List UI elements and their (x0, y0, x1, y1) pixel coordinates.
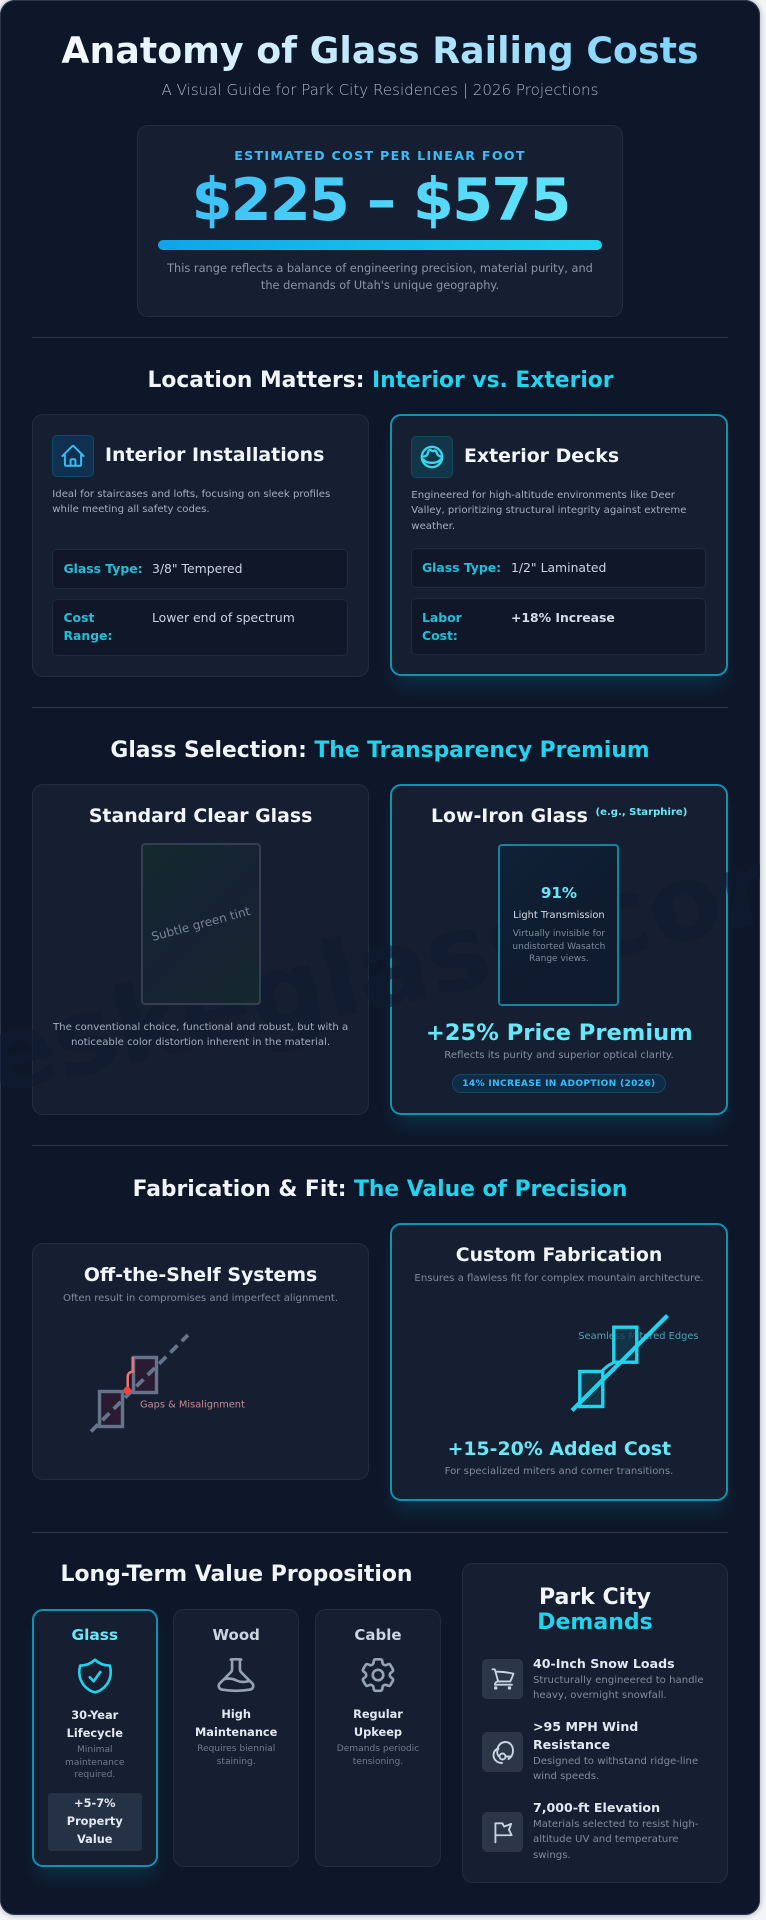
tint label: Subtle green tint (150, 904, 252, 944)
spec: glass type (411, 548, 706, 588)
panel: park city demands (462, 1563, 728, 1883)
spec label: Cost (63, 610, 94, 625)
interior heading: Interior Installations (105, 444, 324, 466)
property value text: Value (77, 1832, 113, 1846)
off-the-shelf description: Often result in compromises and imperfect alignment. (63, 1293, 338, 1304)
wind title: Resistance (533, 1737, 610, 1752)
cost range: $225 – $575 (191, 165, 570, 234)
off-the-shelf heading: Off-the-Shelf Systems (84, 1264, 317, 1286)
glass lifecycle: Lifecycle (67, 1726, 123, 1740)
icon: house (52, 435, 94, 477)
demands heading (537, 1585, 653, 1635)
spec value: 1/2" Laminated (511, 560, 606, 575)
title: Anatomy of Glass Railing Costs (61, 29, 699, 72)
wood maintenance: Maintenance (195, 1725, 277, 1739)
wood note (197, 1744, 275, 1767)
transmission note (512, 929, 606, 964)
transmission label: Light Transmission (513, 910, 605, 921)
glass note (65, 1745, 125, 1780)
cable upkeep: Regular (353, 1707, 403, 1721)
icon: globe (411, 436, 453, 478)
cost label: ESTIMATED COST PER LINEAR FOOT (234, 148, 526, 163)
snow load description (533, 1675, 704, 1701)
spec label (63, 610, 112, 643)
panel: exterior decks (390, 414, 728, 676)
elevation description (533, 1819, 698, 1861)
added cost note: For specialized miters and corner transitions. (445, 1466, 673, 1477)
range bar (158, 240, 602, 250)
panel: off-the-shelf systems (32, 1243, 369, 1480)
panel: interior installations (32, 414, 369, 677)
panel: low-iron glass (390, 784, 728, 1115)
wind description (533, 1756, 698, 1782)
cable note: Demands periodic (337, 1744, 419, 1754)
diagram: misaligned panels (90, 1334, 245, 1433)
panel: cable value (315, 1609, 441, 1867)
interior description: while meeting all safety codes. (52, 504, 210, 515)
panel: custom fabrication (390, 1223, 728, 1501)
exterior description: weather. (411, 521, 455, 532)
icon: shield check (78, 1658, 112, 1694)
spec label: Cost: (422, 628, 458, 643)
spec: cost range (52, 599, 348, 656)
demands heading: Demands (537, 1610, 653, 1635)
heading: fabrication and fit: Fabrication & Fit: The Value of Precision (133, 1177, 627, 1202)
transmission value: 91% (541, 884, 577, 902)
spec value: 3/8" Tempered (152, 561, 243, 576)
property value text: Property (67, 1814, 123, 1828)
glass note: maintenance (65, 1758, 125, 1768)
spec: labor cost (411, 598, 706, 655)
exterior description: Valley, prioritizing structural integrity against extreme (411, 505, 686, 516)
interior description: Ideal for staircases and lofts, focusing on sleek profiles (52, 489, 330, 500)
exterior description: Engineered for high-altitude environments like Deer (411, 490, 675, 501)
elevation description: Materials selected to resist high- (533, 1819, 698, 1830)
glass heading: Glass (71, 1626, 118, 1644)
low-iron heading: Low-Iron Glass (431, 805, 588, 827)
heading: glass selection: Glass Selection: The Transparency Premium (110, 738, 650, 763)
panel: wood value (173, 1609, 299, 1867)
transmission note: undistorted Wasatch (512, 942, 605, 952)
standard heading: Standard Clear Glass (89, 805, 312, 827)
gap label: Gaps & Misalignment (140, 1400, 245, 1411)
wind description: Designed to withstand ridge-line (533, 1756, 698, 1767)
wood maintenance (195, 1707, 277, 1739)
property value box (48, 1793, 142, 1851)
icon: beaker (217, 1658, 255, 1692)
standard description: The conventional choice, functional and robust, but with a (53, 1022, 348, 1033)
standard description (52, 1022, 348, 1048)
wood maintenance: High (221, 1707, 251, 1721)
icon: cart (482, 1659, 523, 1699)
custom description: Ensures a flawless fit for complex mountain architecture. (414, 1273, 704, 1284)
cost description: This range reflects a balance of engineering precision, material purity, and (167, 261, 593, 275)
diagram: mitered panels (570, 1314, 699, 1412)
icon: gear (362, 1658, 394, 1692)
spec value: +18% Increase (511, 610, 615, 625)
elevation description: altitude UV and temperature (533, 1834, 679, 1845)
standard description: noticeable color distortion inherent in the material. (71, 1037, 330, 1048)
cable note (337, 1744, 419, 1767)
elevation title: 7,000-ft Elevation (533, 1800, 660, 1815)
interior description (52, 489, 330, 515)
cable note: tensioning. (353, 1757, 403, 1767)
spec label: Labor (422, 610, 462, 625)
spec value: Lower end of spectrum (152, 610, 295, 625)
spec label: Glass Type: (63, 561, 143, 576)
wind description: wind speeds. (533, 1771, 599, 1782)
wood note: Requires biennial (197, 1744, 275, 1754)
glass lifecycle: 30-Year (71, 1708, 118, 1722)
demands heading: Park City (539, 1585, 651, 1610)
exterior heading: Exterior Decks (464, 445, 619, 467)
added cost: +15-20% Added Cost (448, 1438, 671, 1460)
subtitle: A Visual Guide for Park City Residences | 2026 Projections (162, 81, 598, 99)
starphire note: (e.g., Starphire) (595, 807, 687, 818)
spec label (422, 610, 462, 643)
panel: standard clear glass (32, 784, 369, 1115)
adoption text: 14% INCREASE IN ADOPTION (2026) (462, 1079, 656, 1089)
adoption pill (452, 1074, 666, 1093)
cost description (167, 261, 593, 292)
glass note: required. (74, 1770, 115, 1780)
transmission note: Virtually invisible for (513, 929, 605, 939)
snow load description: heavy, overnight snowfall. (533, 1690, 667, 1701)
icon: flag (482, 1812, 523, 1852)
glass sample: green tint (141, 843, 261, 1005)
wood note: staining. (217, 1757, 256, 1767)
premium note: Reflects its purity and superior optical clarity. (444, 1050, 674, 1061)
heading: long-term value: Long-Term Value Proposition (60, 1562, 412, 1587)
property value text (67, 1796, 123, 1846)
cable upkeep (353, 1707, 403, 1739)
wind title (533, 1719, 638, 1752)
miter label: Seamless Mitered Edges (578, 1331, 699, 1342)
panel: estimated cost (137, 125, 623, 317)
wind title: >95 MPH Wind (533, 1719, 638, 1734)
heading: location matters: Location Matters: Interior vs. Exterior (147, 368, 614, 393)
transmission note: Range views. (529, 954, 589, 964)
spec label: Range: (63, 628, 112, 643)
cable upkeep: Upkeep (354, 1725, 402, 1739)
glass sample: clear (498, 844, 619, 1006)
spec: glass type (52, 549, 348, 589)
panel: glass value (32, 1609, 158, 1867)
price premium: +25% Price Premium (426, 1020, 693, 1046)
snow load title: 40-Inch Snow Loads (533, 1656, 675, 1671)
cost description: the demands of Utah's unique geography. (261, 278, 499, 292)
cable heading: Cable (354, 1626, 402, 1644)
wood heading: Wood (213, 1626, 260, 1644)
icon: wind (482, 1732, 523, 1772)
property value text: +5-7% (74, 1796, 115, 1810)
custom heading: Custom Fabrication (456, 1244, 662, 1266)
elevation description: swings. (533, 1850, 571, 1861)
spec label: Glass Type: (422, 560, 501, 575)
glass lifecycle (67, 1708, 123, 1740)
exterior description (411, 490, 686, 532)
glass note: Minimal (77, 1745, 113, 1755)
snow load description: Structurally engineered to handle (533, 1675, 704, 1686)
